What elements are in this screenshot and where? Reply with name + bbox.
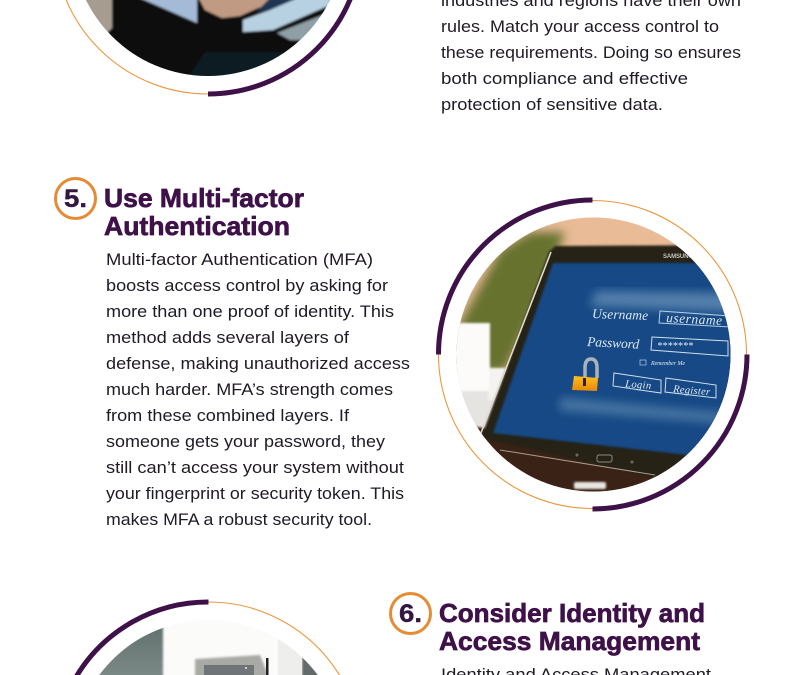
icon: number 5 badge [56,178,96,218]
photo: tablet login screen: Password [586,334,640,352]
heading: step 5: Authentication [104,211,290,241]
tablet screen [493,263,740,457]
ring: purple arc [76,602,208,675]
text block: step 4 body: rules. Match your access control to [441,17,719,36]
photo: tablet login screen: ******* [657,341,693,352]
icon: number 5 badge: 5. [64,185,87,213]
photo: tablet login screen [456,218,730,492]
text block: step 4 body: both compliance and effective [441,69,688,88]
text block: step 5 body: from these combined layers. If [106,406,349,425]
text block: step 5 body: Multi-factor Authentication (MFA) [106,250,373,269]
text block: step 5 body: still can’t access your system without [106,458,404,477]
text block: step 5 body: your fingerprint or security token. This [106,484,404,503]
ring: thin orange arc [208,602,340,675]
ring: purple arc [208,0,362,94]
blurred white objects at left [456,321,508,429]
ring: thin orange arc [438,200,746,508]
text block: step 5 body: much harder. MFA’s strength comes [106,380,393,399]
panel: step 5 photo ring [438,200,747,509]
tablet body [481,245,740,479]
heading: step 6: Access Management [439,626,700,656]
text block: step 5 body: method adds several layers of [106,328,349,347]
text block: step 5 body: boosts access control by asking for [106,276,388,295]
photo: tablet login screen: Username [592,306,648,323]
photo: tablet login screen: Remember Me [650,361,685,367]
ring: thin orange arc [54,0,208,94]
photo: person with hands over dark shirt [86,0,330,76]
ring: purple arcs [438,200,747,509]
tablet buttons [597,455,612,462]
text block: step 4 body: protection of sensitive data. [441,95,663,114]
panel: step 6 photo ring [60,602,360,675]
text block: step 5 body: makes MFA a robust security tool. [106,510,372,529]
panel: step 4 photo ring [54,0,362,94]
icon: number 6 badge [390,594,430,634]
photo: tablet login screen: Register [672,384,711,398]
heading: step 6 [439,598,705,656]
heading: step 5: Use Multi-factor [104,183,304,213]
text block: step 5 body: defense, making unauthorized access [106,354,410,373]
photo: tablet login screen: SAMSUNG [663,254,693,260]
photo: access control terminal [99,628,318,675]
text block: step 5 body: more than one proof of identity. This [106,302,394,321]
text block: step 4 body: these requirements. Doing so ensures [441,43,741,62]
desk below tablet [476,425,682,492]
heading: step 5 [104,183,304,241]
text block: step 5 body [106,250,410,529]
icon: padlock [572,359,598,391]
text block: step 5 body: someone gets your password, they [106,432,386,451]
photo: tablet login screen: Login [624,379,651,392]
text block: step 4 body [441,0,741,114]
heading: step 6: Consider Identity and [439,598,705,628]
photo: tablet login screen: username [666,310,723,328]
icon: number 6 badge: 6. [399,600,422,628]
